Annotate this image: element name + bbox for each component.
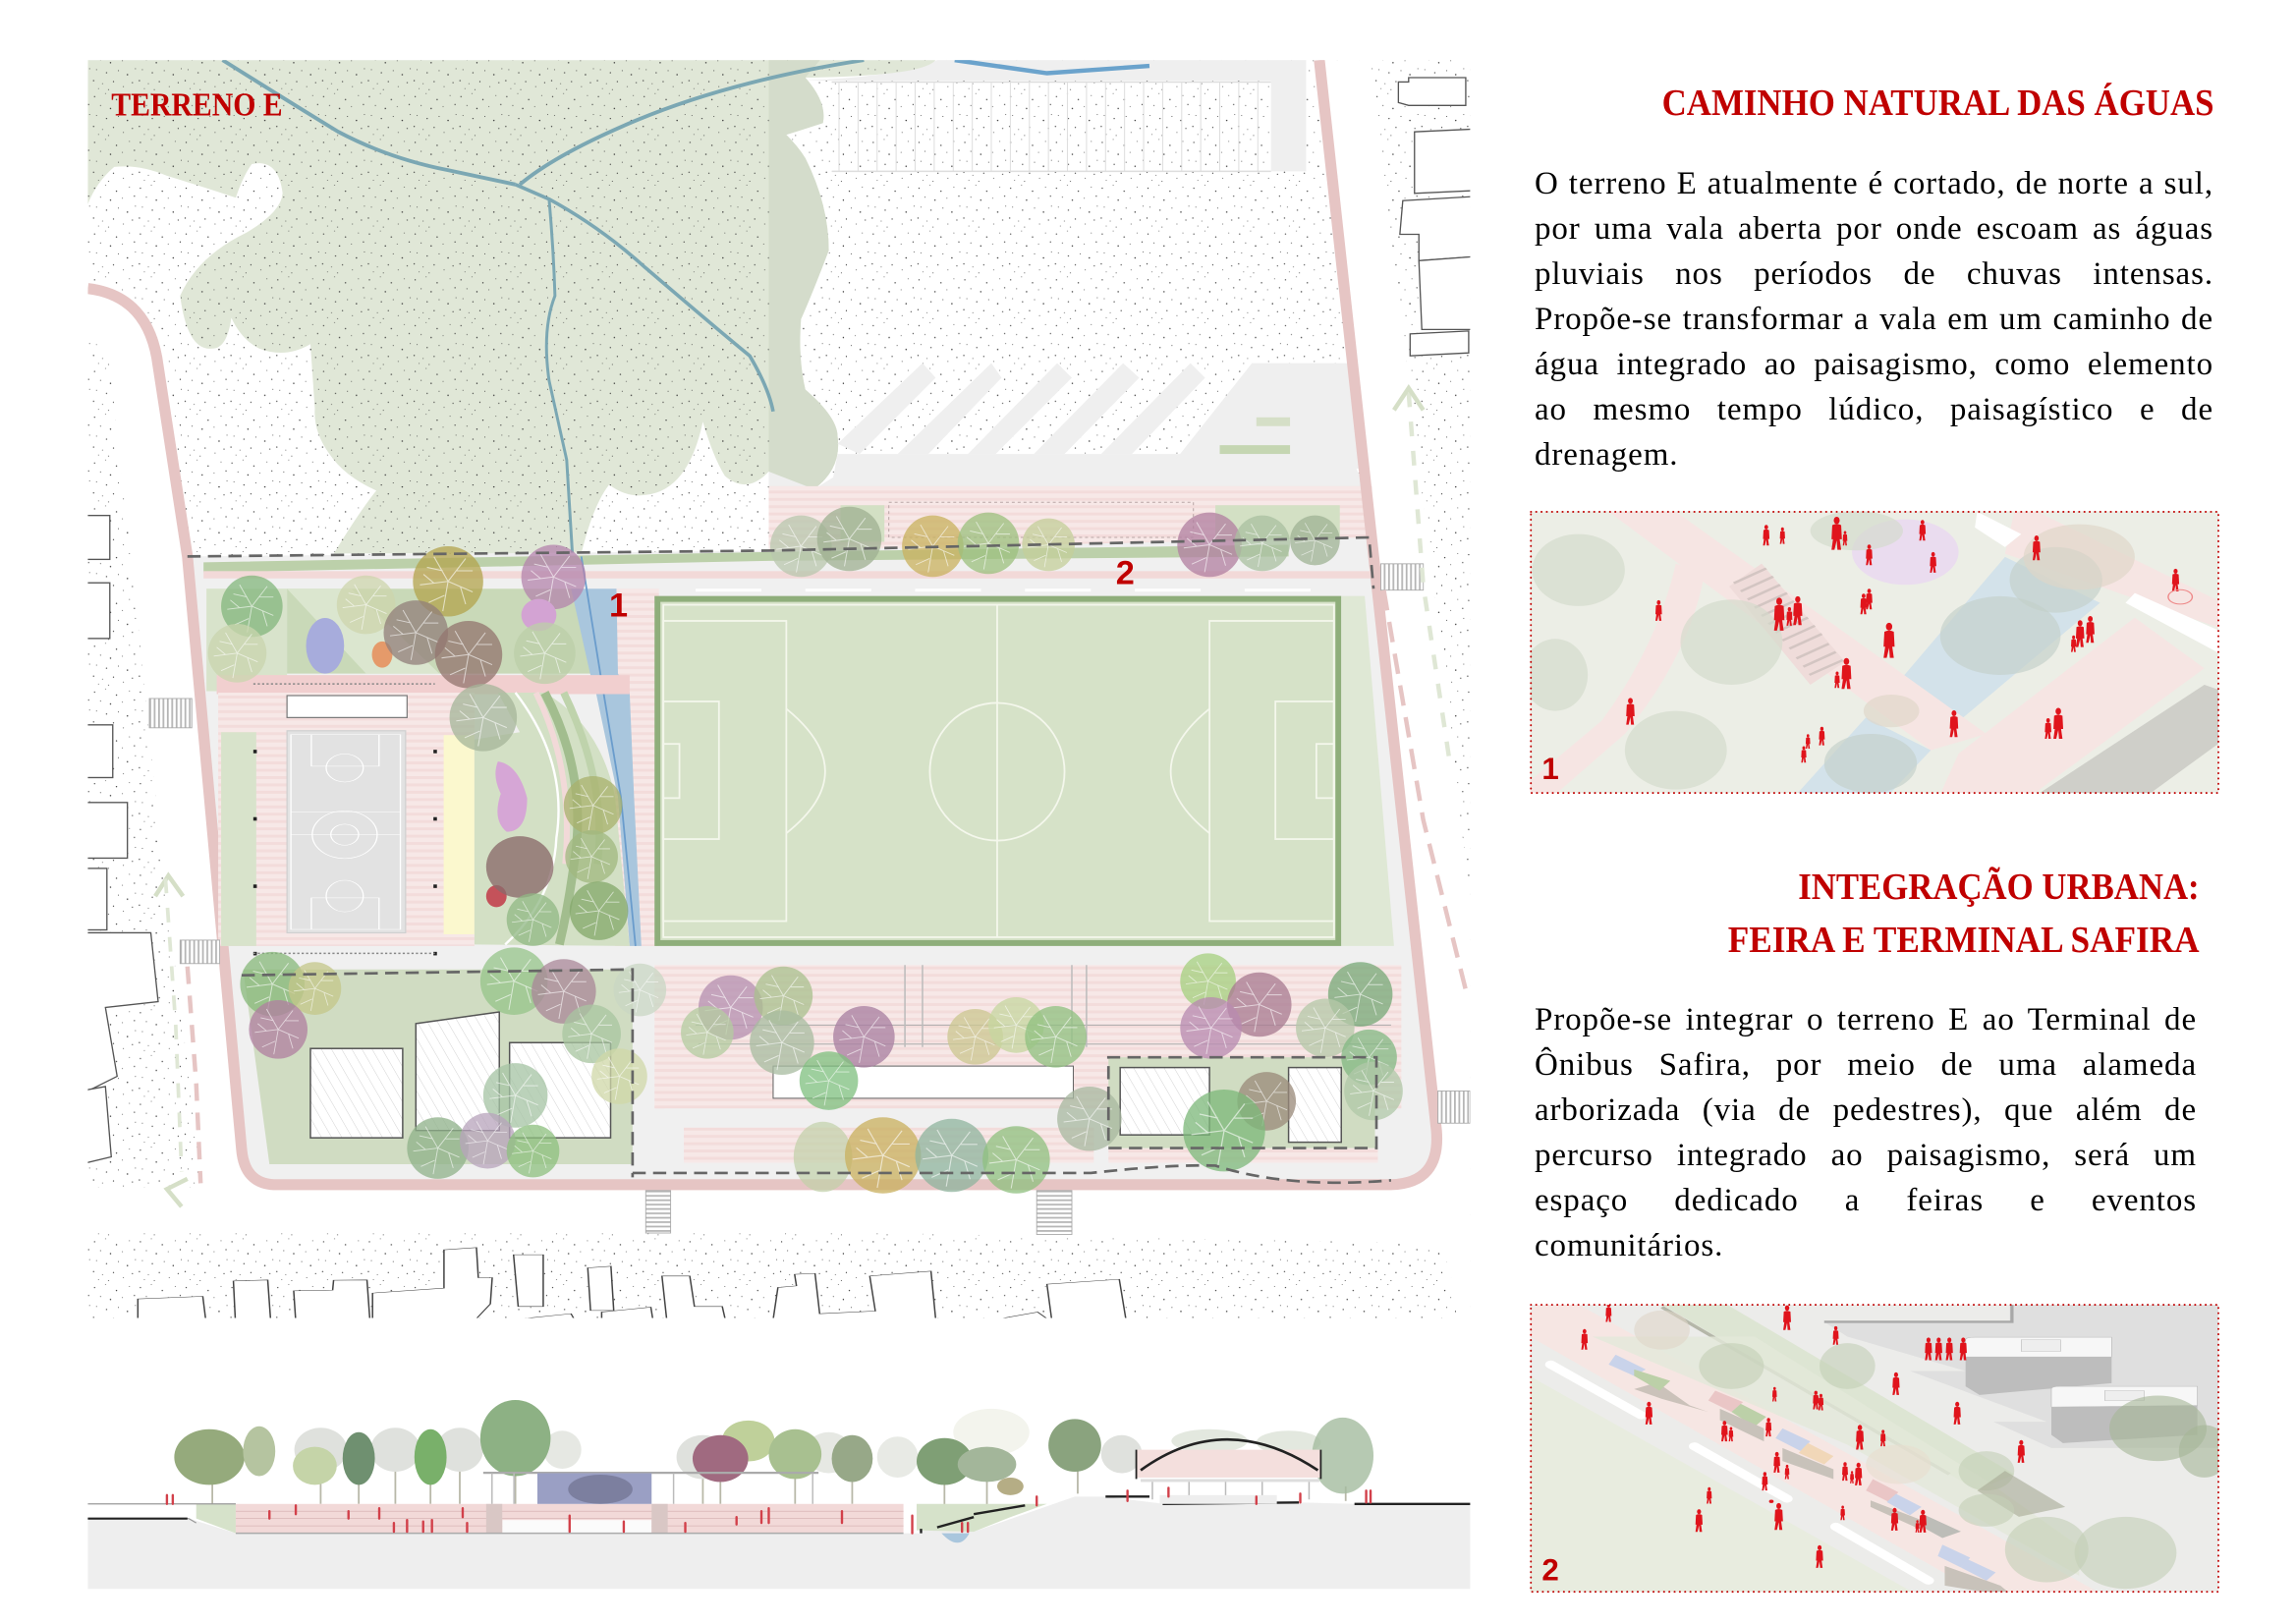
- view 1 water channels: [1796, 557, 2100, 795]
- body text: caminho natural: Propõe-se transformar a vala em um caminho de: [1535, 301, 2213, 336]
- body text: integracao urbana: [1535, 1002, 2197, 1263]
- water channel: [571, 556, 642, 946]
- heading: integracao urbana: FEIRA E TERMINAL SAFIRA: [1728, 920, 2200, 961]
- view 1 frame: [1531, 512, 2218, 793]
- body text: caminho natural: água integrado ao paisagismo, como elemento: [1535, 346, 2213, 381]
- terraced plaza in section: [87, 1496, 1470, 1542]
- people in section: [167, 1487, 1371, 1534]
- paving beside water channel: [615, 588, 659, 946]
- streets around the site: [87, 60, 1470, 1317]
- view 2 market stalls: [1608, 1355, 2014, 1597]
- body text: integracao urbana: Ônibus Safira, por meio de uma alameda: [1535, 1047, 2197, 1083]
- cycle markings: [155, 388, 1467, 1206]
- playground: [206, 588, 593, 692]
- body text: caminho natural: ao mesmo tempo lúdico, paisagístico e de: [1535, 391, 2213, 426]
- view 1 dark band: [2038, 685, 2223, 795]
- body text: integracao urbana: Propõe-se integrar o terreno E ao Terminal de: [1535, 1002, 2197, 1037]
- view 2 people: [1582, 1304, 2025, 1568]
- north green strip and paving: [203, 544, 1371, 591]
- view 1 number: 1: [1541, 752, 1559, 786]
- view 2 number: 2: [1541, 1552, 1559, 1587]
- body text: caminho natural: [1535, 165, 2213, 472]
- site plan: [81, 60, 1479, 1318]
- south parking with diagonal stalls: [768, 364, 1370, 498]
- section background trees: [174, 1400, 1373, 1523]
- neighbouring buildings south: [138, 1248, 1126, 1318]
- view 1 stairs: [1729, 564, 1845, 685]
- curved garden beside channel: [475, 693, 630, 946]
- south plaza paving: [654, 965, 1404, 1174]
- sports court zone: [218, 684, 475, 955]
- map marker 2: 2: [1116, 555, 1135, 592]
- covered building in section: [1137, 1439, 1320, 1504]
- body text: integracao urbana: arborizada (via de pedestres), que além de: [1535, 1092, 2197, 1128]
- view 2 grass: [1530, 1375, 1922, 1597]
- view 2 benches: [1550, 1365, 1929, 1581]
- dashed site boundary: [188, 537, 1391, 1183]
- body text: caminho natural: pluviais nos períodos de chuvas intensas.: [1535, 255, 2213, 291]
- heading: caminho natural das aguas: CAMINHO NATURAL DAS ÁGUAS: [1662, 83, 2214, 124]
- neighbouring buildings left: [81, 516, 158, 1164]
- body text: integracao urbana: percurso integrado ao paisagismo, será um: [1535, 1138, 2197, 1173]
- cross section: [87, 1400, 1470, 1589]
- map marker 1: 1: [609, 588, 628, 625]
- pavilion with mural: [483, 1472, 818, 1504]
- view 1 people: [1626, 517, 2192, 762]
- neighbouring buildings right: [1398, 78, 1479, 356]
- green tree area with water lines: [86, 60, 1149, 556]
- stippled ground: [87, 60, 1470, 1317]
- heading: integracao urbana: INTEGRAÇÃO URBANA:: [1798, 867, 2200, 908]
- soccer field: [654, 596, 1341, 946]
- view 2 terminal platforms: [1824, 1305, 2218, 1448]
- perspective view 2: [1530, 1304, 2230, 1597]
- pink perimeter path: [87, 60, 1436, 1185]
- body text: integracao urbana: espaço dedicado a feiras e eventos: [1535, 1183, 2197, 1218]
- body text: caminho natural: O terreno E atualmente é cortado, de norte a sul,: [1535, 165, 2213, 200]
- trees: [208, 507, 1403, 1194]
- view 2 pink walkway: [1530, 1305, 2107, 1597]
- view 1 pink walkways: [1528, 512, 2223, 795]
- parking area: [803, 60, 1319, 171]
- pink crossing path: [217, 675, 630, 695]
- body text: caminho natural: drenagem.: [1535, 436, 1678, 472]
- heading: integracao urbana: [1728, 867, 2200, 961]
- pedestrian boulevard north: [768, 486, 1372, 550]
- view 2 frame: [1531, 1305, 2218, 1592]
- east green strip: [1341, 596, 1394, 946]
- crosswalks: [149, 564, 1470, 1235]
- section ground: [87, 1496, 1470, 1589]
- view 1 play circle: [1852, 520, 1959, 585]
- lower park with buildings: [243, 970, 633, 1164]
- view 2 buses: [1966, 1337, 2198, 1443]
- perspective view 1: [1523, 511, 2223, 795]
- label: terreno E: TERRENO E: [111, 86, 283, 124]
- body text: integracao urbana: comunitários.: [1535, 1228, 1723, 1263]
- view 2 trees: [1634, 1311, 2230, 1589]
- site ground: [186, 537, 1435, 1180]
- view 1 white strip: [1975, 512, 2223, 655]
- body text: caminho natural: por uma vala aberta por onde escoam as águas: [1535, 210, 2213, 246]
- view 2 green strip: [1662, 1305, 2014, 1490]
- view 1 tree canopies: [1523, 511, 2135, 793]
